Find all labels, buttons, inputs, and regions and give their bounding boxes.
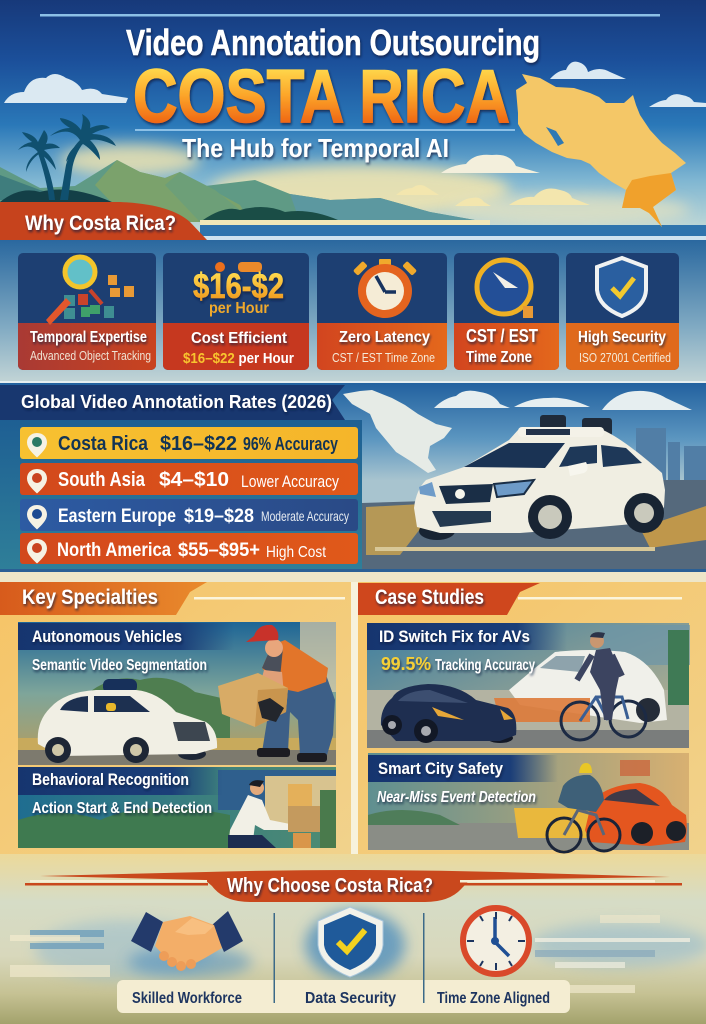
row: North America: North America xyxy=(57,540,171,561)
card: CST / EST xyxy=(454,253,559,370)
row: Costa Rica: 96% Accuracy xyxy=(243,434,338,454)
card: Temporal Expertise: Advanced Object Tracking xyxy=(30,348,151,363)
scene: ID switch fix: Tracking Accuracy xyxy=(435,657,535,674)
icon: magnifier over data blocks xyxy=(46,257,134,325)
label: Data Security: Data Security xyxy=(305,990,396,1007)
icon: price badge: $16-$2 xyxy=(193,267,284,306)
panel: why choose xyxy=(0,854,706,1024)
icon: storefront xyxy=(218,770,336,848)
title: Video Annotation Outsourcing xyxy=(126,22,540,63)
illustration: white autonomous SUV xyxy=(414,415,665,540)
icon: handshake xyxy=(131,911,243,971)
heading: COSTA RICA: COSTA RICA xyxy=(133,54,510,138)
heading banner: Why Choose Costa Rica? xyxy=(25,870,682,902)
icon: water strip xyxy=(200,225,706,236)
scene: behavioral recognition: Behavioral Recognition xyxy=(32,770,189,789)
row: North America xyxy=(20,533,358,564)
heading tab: Why Costa Rica? xyxy=(0,202,207,240)
card: Cost Efficient: $16–$22 per Hour xyxy=(183,350,294,367)
icon: pin xyxy=(27,433,47,458)
heading tab: Key Specialties xyxy=(0,582,345,615)
card: High Security: High Security xyxy=(578,329,666,346)
scene: ID switch fix xyxy=(367,623,690,748)
card: Temporal Expertise xyxy=(18,253,156,370)
scene: ID switch fix: ID Switch Fix for AVs xyxy=(379,627,530,646)
card: Cost Efficient xyxy=(163,253,309,370)
icon: dark blue car xyxy=(381,684,516,743)
heading: global rates: Global Video Annotation Rates (2026) xyxy=(21,392,332,412)
icon: pin xyxy=(27,505,47,530)
heading tab: Key Specialties: Key Specialties xyxy=(22,586,158,609)
icon: palm trees xyxy=(18,114,116,200)
icon: price badge xyxy=(193,262,284,317)
heading band xyxy=(0,385,345,420)
icon: pin xyxy=(27,469,47,494)
map silhouette xyxy=(343,390,452,473)
card: High Security xyxy=(566,253,679,370)
divider xyxy=(423,913,424,1003)
icon: white car behind xyxy=(509,650,667,723)
scene: smart city safety: Near-Miss Event Detection xyxy=(377,789,536,806)
scene: autonomous vehicles: Autonomous Vehicles xyxy=(32,627,182,646)
scene: autonomous vehicles xyxy=(18,622,336,765)
card: CST / EST: CST / EST xyxy=(466,326,538,346)
row: Eastern Europe: Moderate Accuracy xyxy=(261,508,349,524)
icon: pin xyxy=(27,539,47,564)
row: Costa Rica: Costa Rica xyxy=(58,433,149,455)
row: Eastern Europe: $19–$28 xyxy=(184,506,254,527)
icon: man handing parcel xyxy=(228,780,320,848)
scene: behavioral recognition: Action Start & End Detection xyxy=(32,800,212,817)
card: Zero Latency xyxy=(317,253,447,370)
icon: price badge: per Hour xyxy=(209,300,269,317)
icon: shield xyxy=(597,258,646,316)
road xyxy=(362,480,706,570)
heading tab: Why Costa Rica?: Why Costa Rica? xyxy=(25,212,176,235)
row: Eastern Europe: Eastern Europe xyxy=(58,506,176,527)
scene: ID switch fix: 99.5% xyxy=(381,654,431,674)
panel: header sky scene xyxy=(0,0,706,240)
icon: Costa Rica map xyxy=(516,74,686,227)
icon: gold clock xyxy=(477,260,533,318)
icon: worker with box xyxy=(218,625,335,762)
icon: mountains xyxy=(0,160,490,225)
icon: white robo-taxi xyxy=(38,679,217,763)
divider xyxy=(135,129,515,131)
icon: cyclist xyxy=(561,632,646,740)
panel: why Costa Rica cards band xyxy=(0,240,706,383)
card: High Security: ISO 27001 Certified xyxy=(579,350,671,365)
scene: autonomous vehicles: Semantic Video Segmentation xyxy=(32,657,207,674)
label: Skilled Workforce: Skilled Workforce xyxy=(132,990,242,1007)
row: Costa Rica xyxy=(20,427,358,459)
card: Zero Latency: CST / EST Time Zone xyxy=(332,350,435,365)
heading banner: Why Choose Costa Rica?: Why Choose Costa Rica? xyxy=(227,875,433,897)
icon: stopwatch xyxy=(353,259,417,318)
icon: shield with check xyxy=(318,907,383,977)
subtitle band: Autonomous Vehicles xyxy=(18,623,234,650)
heading tab: Case Studies xyxy=(358,583,682,615)
row: North America: $55–$95+ xyxy=(178,540,260,561)
row: South Asia: Lower Accuracy xyxy=(241,472,339,491)
icon: orange car xyxy=(514,783,687,846)
panel: key specialties xyxy=(0,569,706,860)
card: Cost Efficient: Cost Efficient xyxy=(191,330,288,347)
label: Time Zone Aligned: Time Zone Aligned xyxy=(437,990,550,1007)
icon: cyclist with yellow helmet xyxy=(547,763,620,852)
row: Costa Rica: $16–$22 xyxy=(160,433,237,455)
card: CST / EST: Time Zone xyxy=(466,349,532,366)
scene: smart city safety: Smart City Safety xyxy=(378,759,503,778)
divider xyxy=(274,913,275,1003)
heading tab: Case Studies: Case Studies xyxy=(375,586,484,609)
panel: case studies background xyxy=(358,582,706,854)
card: Zero Latency: Zero Latency xyxy=(339,329,430,346)
panel: global rates xyxy=(0,383,706,570)
icon: clock xyxy=(463,908,529,974)
card: Temporal Expertise: Temporal Expertise xyxy=(30,329,147,346)
city skyline xyxy=(636,428,706,484)
row: North America: High Cost xyxy=(266,544,326,561)
row: South Asia: $4–$10 xyxy=(159,469,229,491)
row: Eastern Europe xyxy=(20,499,358,531)
row: South Asia xyxy=(20,463,358,495)
scene: behavioral recognition xyxy=(18,767,336,848)
subtitle: The Hub for Temporal AI xyxy=(182,133,449,163)
row: South Asia: South Asia xyxy=(58,469,146,491)
icon: clouds xyxy=(4,62,706,206)
clouds in scene xyxy=(434,391,692,410)
label strip xyxy=(117,980,570,1013)
scene: smart city safety xyxy=(368,753,689,852)
